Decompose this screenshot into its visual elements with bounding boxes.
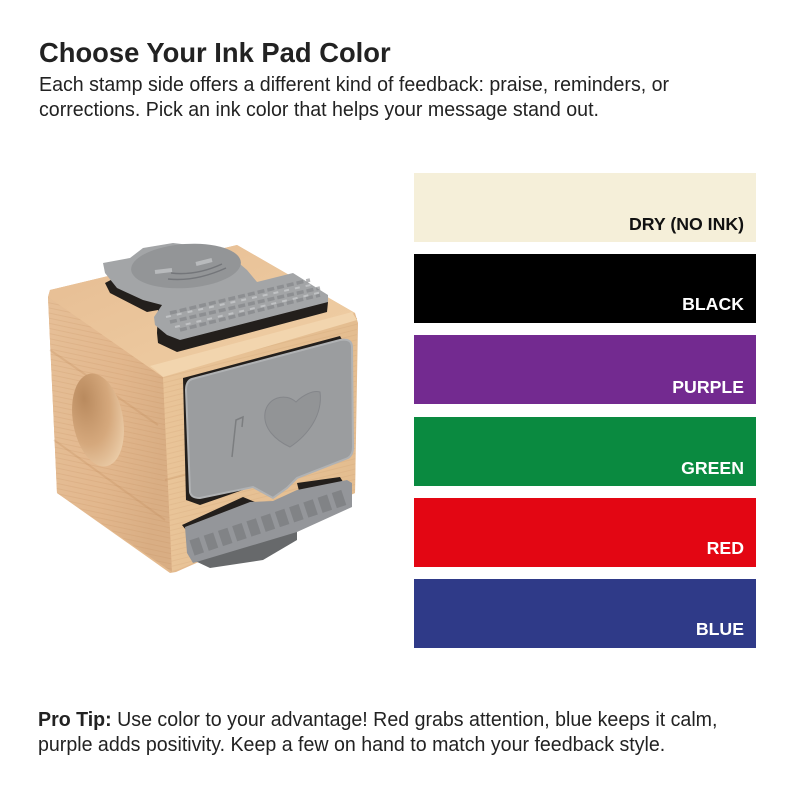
pro tip: [38, 709, 717, 756]
label: red: RED: [707, 538, 744, 558]
top stamp: smiley: [103, 240, 328, 352]
pro tip: purple adds positivity. Keep a few on hand to match your feedback style.: [38, 734, 665, 756]
intro text: corrections. Pick an ink color that helps your message stand out.: [39, 99, 599, 121]
wooden cube: [48, 245, 358, 573]
speech bubble stamp with heart: [183, 336, 353, 505]
label: dry: DRY (NO INK): [629, 214, 744, 234]
label: green: GREEN: [681, 458, 744, 478]
intro text: Each stamp side offers a different kind of feedback: praise, reminders, or: [39, 74, 669, 96]
swatch: blue: [414, 579, 756, 648]
heart: [265, 392, 320, 447]
swatch: green: [414, 417, 756, 486]
swatch: red: [414, 498, 756, 567]
bottom stamp: love this: [182, 477, 352, 568]
label: black: BLACK: [682, 294, 744, 314]
pro tip: Pro Tip: Use color to your advantage! Red grabs attention, blue keeps it calm,: [38, 709, 717, 731]
label: purple: PURPLE: [672, 377, 744, 397]
number one: [232, 417, 243, 457]
finger hole: [65, 369, 131, 471]
swatch: black: [414, 254, 756, 323]
swatch: dry: [414, 173, 756, 242]
intro text: [39, 74, 669, 121]
swatch: purple: [414, 335, 756, 404]
label: blue: BLUE: [696, 619, 744, 639]
title: Choose Your Ink Pad Color: [39, 37, 391, 68]
